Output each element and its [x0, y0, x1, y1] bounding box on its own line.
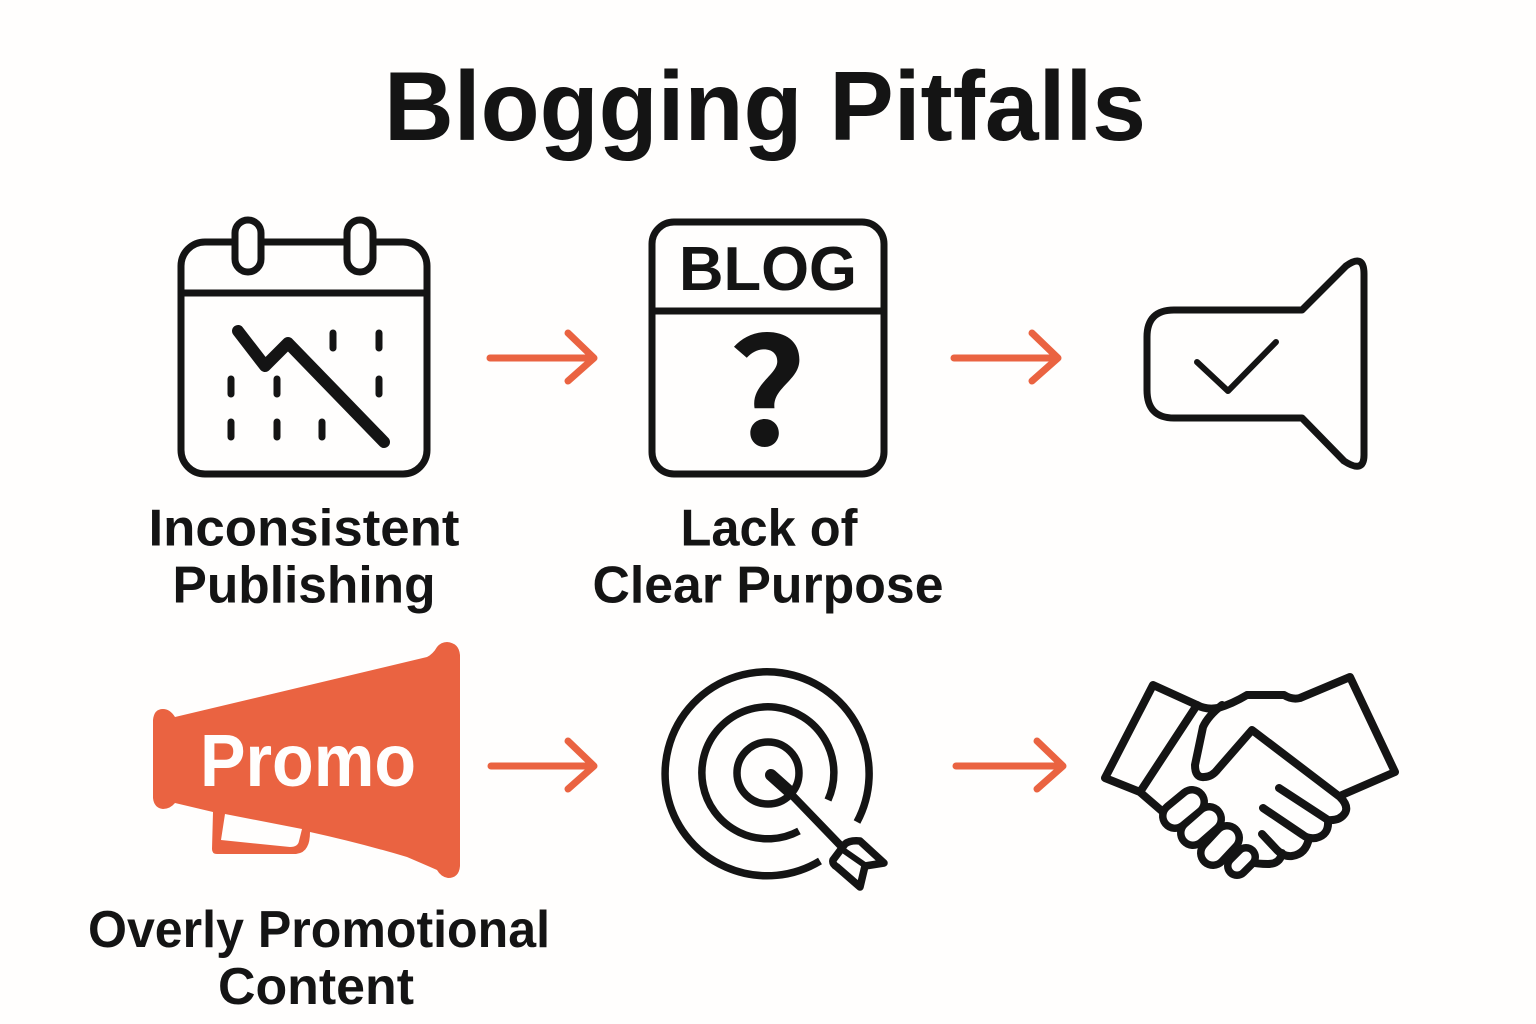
arrow: row 1 second — [954, 333, 1058, 381]
fingers — [1175, 802, 1227, 853]
label: Inconsistent Publishing: Inconsistent — [148, 500, 460, 558]
icon: target with arrow — [665, 672, 884, 887]
title: Blogging Pitfalls — [384, 51, 1146, 161]
label: Overly Promotional Content — [88, 901, 550, 1016]
icon: orange Promo megaphone: Promo — [200, 719, 416, 802]
icon: speech bubble megaphone with check — [1147, 261, 1364, 466]
icon: blog page with question mark — [652, 222, 884, 488]
arrow: row 2 second — [956, 741, 1063, 789]
icon: orange Promo megaphone — [153, 642, 460, 878]
icon: calendar with falling line — [181, 220, 427, 474]
label: Overly Promotional Content: Content — [218, 958, 414, 1016]
label: Inconsistent Publishing — [148, 500, 460, 614]
icon: blog page with question mark: ? — [727, 277, 807, 488]
label: Lack of Clear Purpose — [592, 500, 944, 614]
label: Overly Promotional Content: Overly Promotional — [88, 901, 550, 959]
hand outline — [1197, 677, 1395, 795]
icon: blog page with question mark: BLOG — [679, 235, 857, 304]
icon: handshake — [1105, 677, 1395, 866]
label: Inconsistent Publishing: Publishing — [172, 556, 436, 614]
label: Lack of Clear Purpose: Lack of — [680, 500, 858, 558]
thumb and upper hand — [1195, 705, 1346, 820]
label: Lack of Clear Purpose: Clear Purpose — [592, 556, 944, 614]
arrow: row 1 first — [490, 333, 594, 381]
arrow: row 2 first — [491, 741, 594, 789]
left cuff — [1105, 685, 1197, 792]
